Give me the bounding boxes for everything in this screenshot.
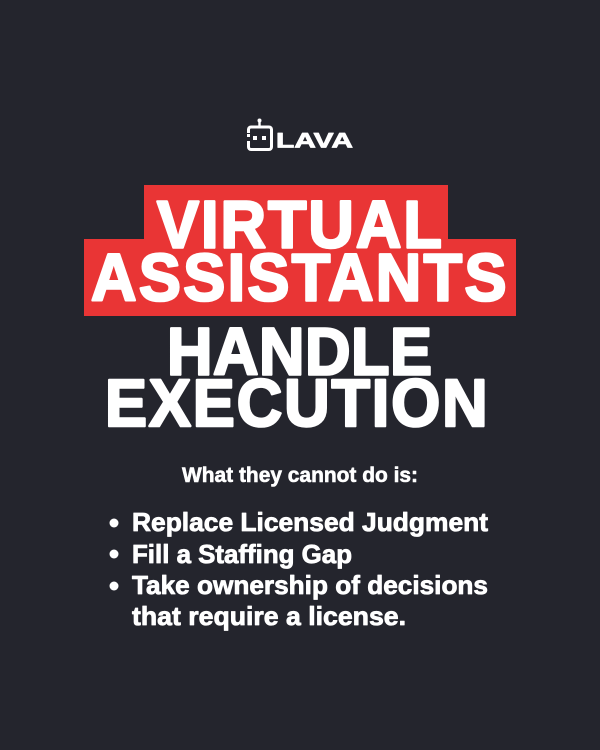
logo: LAVA [245,118,353,152]
heading: ASSISTANTS: ASSISTANTS [91,240,506,315]
bullet list [110,507,488,631]
heading: HANDLE: HANDLE [167,314,432,389]
bullet: take ownership: Take ownership of decisions [132,570,488,600]
title highlight: red stepped panel [84,185,516,316]
heading: EXECUTION: EXECUTION [105,365,488,440]
logo wordmark: LAVA [276,130,353,152]
bullet: fill a staffing gap: Fill a Staffing Gap [132,539,352,569]
bullet: take ownership: that require a license. [132,601,406,631]
bullet: take ownership [110,570,488,631]
heading: VIRTUAL: VIRTUAL [157,187,442,262]
subheading: What they cannot do is: [182,464,418,487]
bullet: replace licensed judgment: Replace Licensed Judgment [132,507,488,537]
icon: robot head [245,118,272,150]
